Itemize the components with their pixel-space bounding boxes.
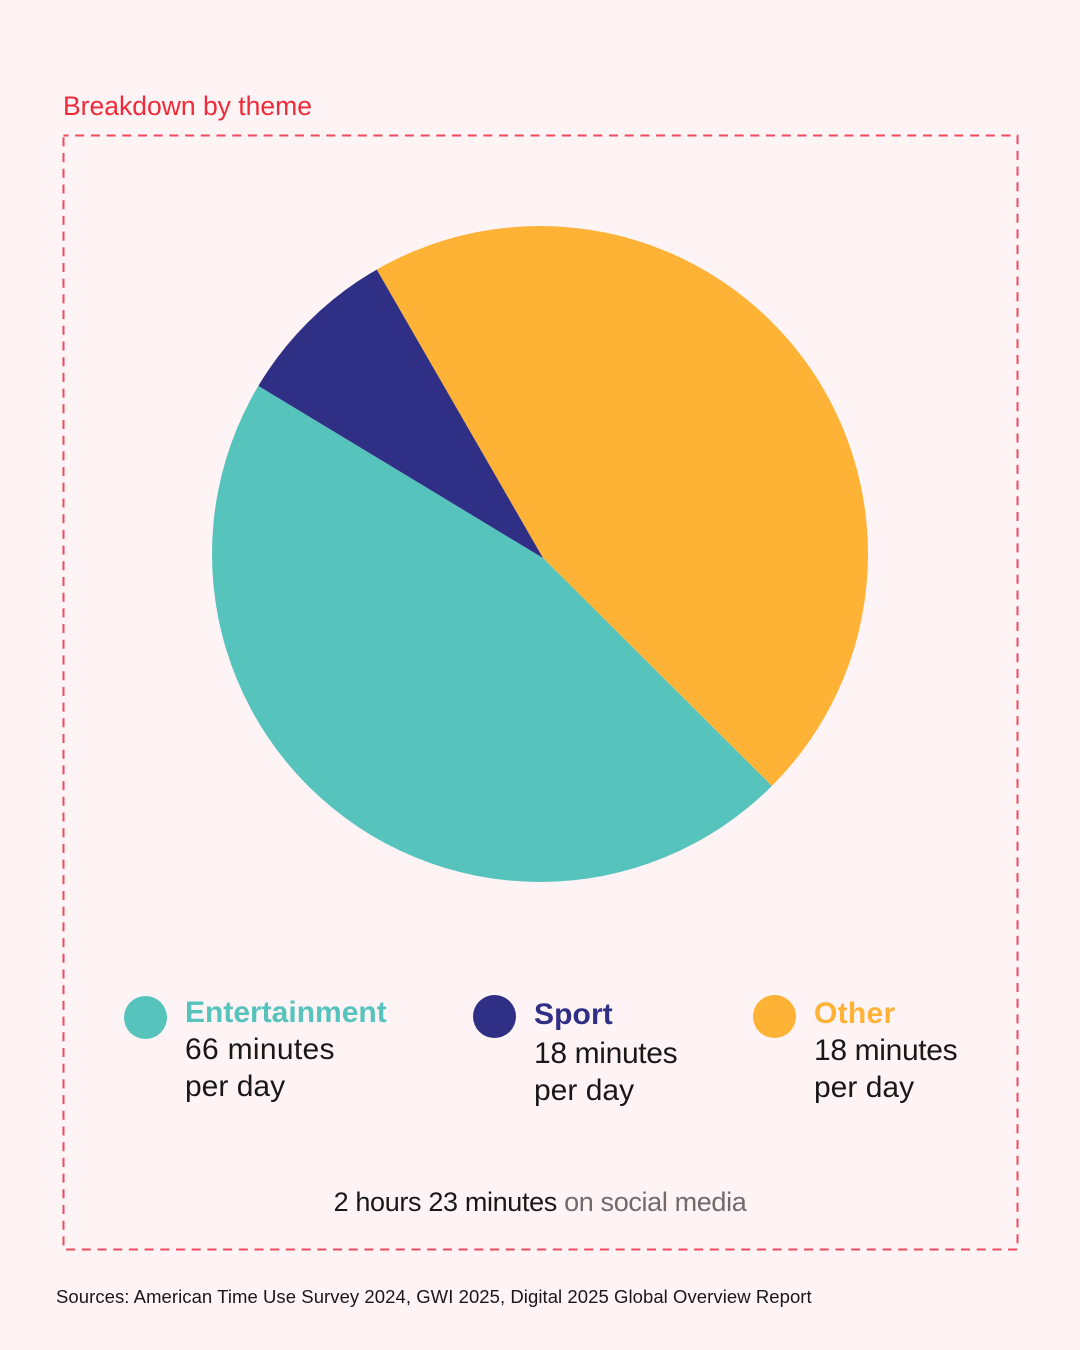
legend: Sport bbox=[473, 995, 677, 1107]
label: Other bbox=[814, 997, 957, 1104]
sources: Sources: American Time Use Survey 2024, GWI 2025, Digital 2025 Global Overview Report bbox=[56, 1286, 812, 1307]
label: Entertainment: Entertainment bbox=[185, 996, 387, 1029]
label: Sport: 18 minutes bbox=[534, 1037, 677, 1070]
pie chart bbox=[212, 226, 868, 882]
label: Sport: per day bbox=[534, 1074, 634, 1107]
label: Entertainment: 66 minutes bbox=[185, 1033, 335, 1066]
label: Other: Other bbox=[814, 997, 896, 1030]
icon: Other dot bbox=[753, 995, 796, 1038]
slice: Sport bbox=[258, 270, 543, 558]
legend: Other bbox=[753, 995, 957, 1104]
slice: Other bbox=[376, 226, 868, 786]
label: Sport bbox=[534, 998, 677, 1107]
label: Entertainment: per day bbox=[185, 1070, 285, 1103]
heading: Breakdown by theme: Breakdown by theme bbox=[63, 91, 312, 121]
slice: Entertainment bbox=[212, 386, 772, 882]
total caption: 2 hours 23 minutes on social media bbox=[334, 1187, 746, 1217]
label: Entertainment bbox=[185, 996, 387, 1103]
icon: Entertainment dot bbox=[124, 996, 167, 1039]
legend: Entertainment bbox=[124, 996, 387, 1103]
label: Sport: Sport bbox=[534, 998, 613, 1031]
label: Other: per day bbox=[814, 1071, 914, 1104]
icon: Sport dot bbox=[473, 995, 516, 1038]
label: Other: 18 minutes bbox=[814, 1034, 957, 1067]
